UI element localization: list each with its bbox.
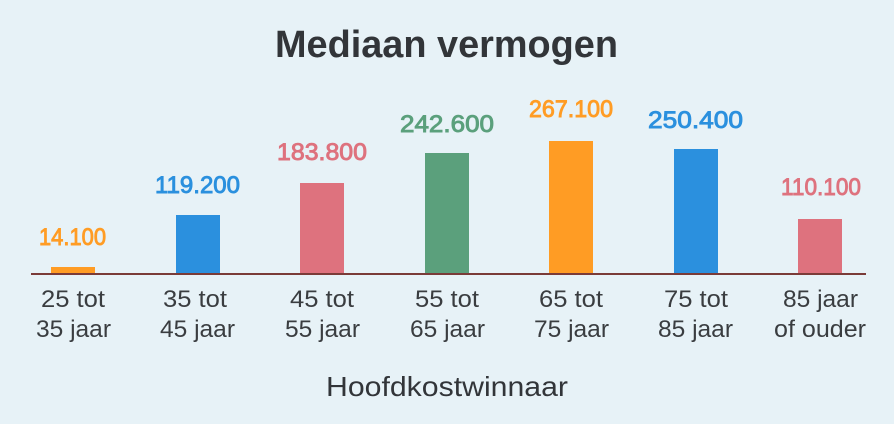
value: 242.600: 242.600 (400, 111, 494, 138)
category: 35 tot 45 jaar (160, 286, 235, 343)
value: 14.100: 14.100 (39, 224, 106, 251)
category: 65 tot 75 jaar (534, 286, 609, 343)
category: 75 tot 85 jaar: 85 jaar (658, 316, 733, 343)
category: 55 tot 65 jaar: 55 tot (415, 286, 479, 313)
category: 85 jaar of ouder (774, 286, 866, 343)
category: 55 tot 65 jaar: 65 jaar (410, 316, 485, 343)
category: 85 jaar of ouder: 85 jaar (783, 286, 858, 313)
bar: 85 jaar of ouder (798, 219, 842, 274)
category: 75 tot 85 jaar (658, 286, 733, 343)
category: 55 tot 65 jaar (410, 286, 485, 343)
bar: 55 tot 65 jaar (425, 153, 469, 274)
category: 85 jaar of ouder: of ouder (774, 316, 866, 343)
category: 35 tot 45 jaar: 45 jaar (160, 316, 235, 343)
category: 45 tot 55 jaar: 45 tot (290, 286, 354, 313)
bar: 35 tot 45 jaar (176, 215, 220, 274)
value: 183.800: 183.800 (277, 139, 367, 166)
bar chart (31, 141, 866, 275)
bar: 45 tot 55 jaar (300, 183, 344, 274)
category: 25 tot 35 jaar: 35 jaar (36, 316, 111, 343)
value: 267.100: 267.100 (529, 96, 613, 123)
value labels (39, 96, 861, 251)
bar: 65 tot 75 jaar (549, 141, 593, 274)
category: 45 tot 55 jaar: 55 jaar (285, 316, 360, 343)
category labels (36, 286, 866, 343)
category: 25 tot 35 jaar: 25 tot (41, 286, 105, 313)
category: 65 tot 75 jaar: 75 jaar (534, 316, 609, 343)
category: 65 tot 75 jaar: 65 tot (539, 286, 603, 313)
title: Mediaan vermogen (275, 24, 618, 66)
category: 75 tot 85 jaar: 75 tot (664, 286, 728, 313)
category: 45 tot 55 jaar (285, 286, 360, 343)
axis line (31, 273, 866, 275)
axis title: Hoofdkostwinnaar (326, 371, 568, 402)
category: 35 tot 45 jaar: 35 tot (163, 286, 227, 313)
value: 110.100: 110.100 (781, 174, 861, 201)
value: 250.400: 250.400 (648, 107, 743, 134)
bar: 75 tot 85 jaar (674, 149, 718, 274)
bar: 25 tot 35 jaar (51, 267, 95, 274)
category: 25 tot 35 jaar (36, 286, 111, 343)
value: 119.200: 119.200 (155, 172, 240, 199)
